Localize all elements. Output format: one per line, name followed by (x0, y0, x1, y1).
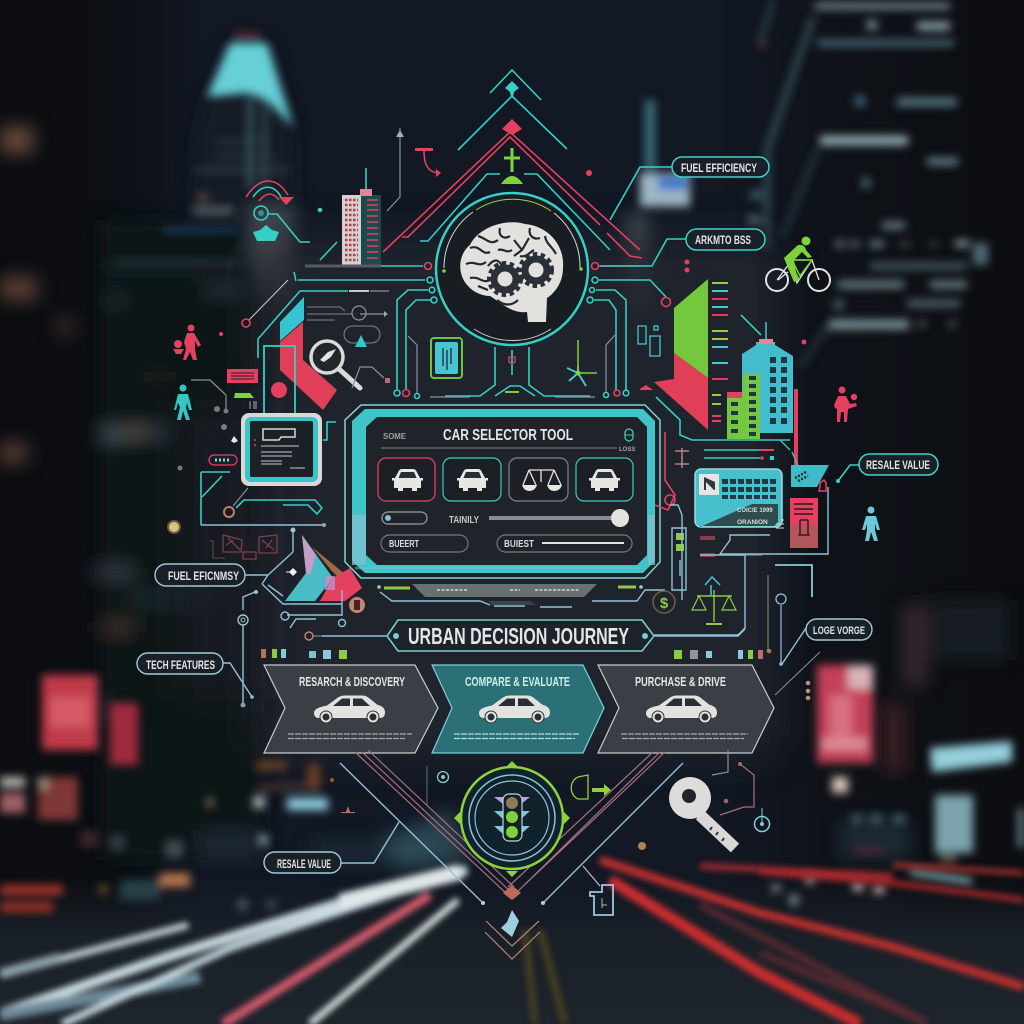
label: fuel eficnmsy: FUEL EFICNMSY (168, 569, 239, 583)
icon: traffic light medallion (454, 761, 570, 877)
vehicle buttons (378, 458, 633, 501)
icon: person with bag (right) (834, 386, 857, 422)
icon: cyclist (766, 236, 830, 291)
title: urban decision journey (290, 619, 745, 651)
panel: right card and document: COICIE 1999 (737, 508, 773, 514)
panel: car selector tool: SOME (383, 432, 407, 441)
journey step: compare & evaluate (432, 665, 604, 753)
panel: right card and document (655, 432, 829, 600)
icon: person (right lower) (862, 506, 880, 541)
label: loge vorge: LOGE VORGE (813, 625, 865, 637)
budget fields (381, 535, 632, 552)
brain icon in circle (436, 193, 588, 345)
v-shaped lines (330, 750, 683, 959)
top chevrons and roof lines (383, 70, 642, 258)
central dark panel glow (250, 235, 780, 760)
lower left lights (0, 777, 25, 787)
icon: scales and dollar (653, 555, 820, 700)
slider row: TAINILY (449, 514, 479, 526)
icon: left tower building (305, 168, 381, 266)
circuit lines around the brain (219, 262, 670, 398)
right side circuit with stripes (638, 260, 806, 440)
label: loge vorge (782, 619, 872, 664)
light trails (0, 860, 1024, 1024)
panel: car selector tool (345, 405, 660, 578)
colour squares (261, 649, 763, 659)
label: fuel eficnmsy (155, 564, 245, 586)
panel: car selector tool: LOSS (619, 447, 635, 453)
label: resale value (bottom left) (264, 822, 399, 873)
budget fields: BUIEST (504, 539, 534, 550)
label: resale value (right) (836, 454, 938, 483)
right office lights (815, 3, 988, 329)
icons: faded maroon chips (210, 535, 277, 559)
panel title: CAR SELECTOR TOOL (443, 427, 573, 444)
label: arkmto bss (600, 229, 765, 266)
icon: scales and dollar: $ (660, 595, 669, 612)
journey step: research & discovery (264, 665, 438, 753)
title: urban decision journey: URBAN DECISION JOURNEY (408, 623, 629, 649)
icon: key (669, 750, 770, 848)
icon: door and arrow (571, 775, 611, 799)
people on the left (173, 324, 201, 420)
journey step: purchase & drive (598, 665, 774, 753)
icon: document bottom (583, 866, 613, 915)
tower (207, 43, 293, 127)
status bar under selector (377, 584, 665, 607)
panel: analytics shapes and magnifier (264, 297, 597, 416)
right small lights (806, 876, 814, 883)
budget fields: BUEERT (389, 539, 419, 550)
slider row (382, 509, 629, 527)
label: resale value (bottom left): RESALE VALUE (277, 859, 331, 871)
street signs (42, 675, 98, 750)
label: arkmto bss: ARKMTO BSS (695, 235, 751, 247)
label: fuel efficiency (top right) (610, 157, 769, 220)
label: fuel efficiency (top right): FUEL EFFICIENCY (681, 163, 757, 175)
label: tech features (137, 653, 254, 699)
label: resale value (right): RESALE VALUE (866, 460, 930, 472)
icon: wifi and location at upper left (246, 181, 322, 242)
label: tech features: TECH FEATURES (146, 658, 215, 672)
journey step: compare & evaluate: COMPARE & EVALUATE (465, 675, 570, 689)
panel: right card and document: ORANION (737, 519, 768, 526)
icon: right city buildings (727, 339, 798, 465)
journey step: purchase & drive: PURCHASE & DRIVE (635, 675, 726, 689)
panel: colourful chevron arrow (238, 528, 366, 708)
panel: left monitor and side widgets (168, 369, 336, 533)
journey step: research & discovery: RESARCH & DISCOVERY (299, 675, 405, 689)
